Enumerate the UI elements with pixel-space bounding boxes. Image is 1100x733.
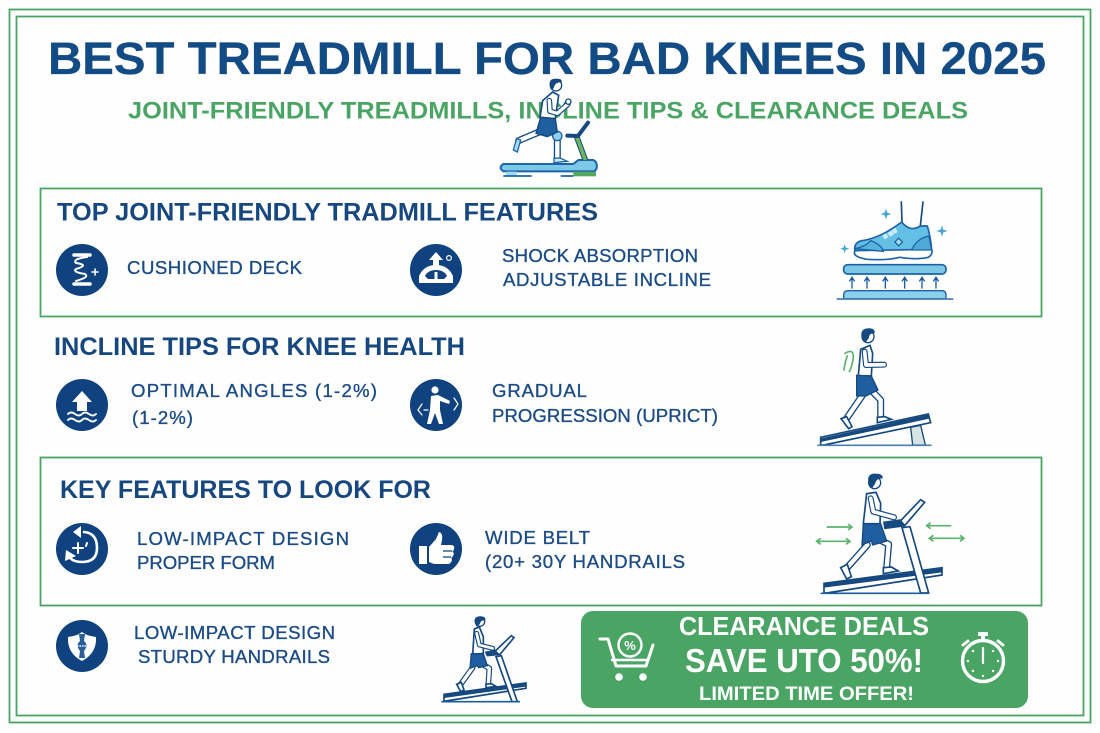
panel: key features [40,458,1042,606]
illustration: treadmill walker with arrows [817,474,964,593]
text: shock absorption, adjustable incline: ADJUSTABLE INCLINE [503,269,711,290]
text: low-impact design, proper form: LOW-IMPACT DESIGN [137,528,349,549]
icon: person with arrows [410,379,462,431]
text: wide belt [485,527,685,572]
text: optimal angles: (1-2%) [132,407,193,428]
heading: incline tips: INCLINE TIPS FOR KNEE HEALTH [54,333,465,361]
icon: stopwatch [962,632,1004,682]
text: save up to 50%: SAVE UTO 50%! [685,642,923,679]
icon: rotation arrows [56,523,108,575]
text: limited time offer: LIMITED TIME OFFER! [699,683,914,705]
illustration: walker on incline [817,328,932,445]
text: low-impact design, sturdy handrails: STURDY HANDRAILS [138,646,330,667]
text: shock absorption, adjustable incline [502,245,711,290]
heading: features: TOP JOINT-FRIENDLY TRADMILL FEATURES [57,198,598,226]
text: low-impact design, proper form: PROPER FORM [137,552,275,573]
text: wide belt: (20+ 30Y HANDRAILS [485,551,685,572]
text: low-impact design, proper form [137,528,349,573]
illustration: cushioned shoe [837,202,953,299]
icon: cart with percent [600,634,653,681]
text: cushioned deck: CUSHIONED DECK [127,257,303,278]
text: optimal angles: OPTIMAL ANGLES (1-2%) [131,380,377,401]
panel: top joint-friendly features [40,188,1042,316]
icon: thumbs up [410,523,462,575]
text: optimal angles [131,380,377,428]
icon: cart with percent: % [624,638,636,653]
icon: arrow up and waves [56,379,108,431]
icon: incline gauge [410,244,462,296]
text: low-impact design, sturdy handrails [134,622,335,667]
icon: shield with knee [56,620,108,672]
illustration: small treadmill walker [441,616,526,702]
text: wide belt: WIDE BELT [485,527,590,548]
text: low-impact design, sturdy handrails: LOW-IMPACT DESIGN [134,622,335,643]
text: gradual progression: GRADUAL [492,380,587,401]
icon: spring [56,244,108,296]
text: shock absorption, adjustable incline: SHOCK ABSORPTION [502,245,698,266]
text: gradual progression: PROGRESSION (UPRICT) [492,405,718,426]
text: gradual progression [492,380,718,426]
text: clearance deals: CLEARANCE DEALS [679,613,929,641]
illustration: runner on treadmill [501,79,597,176]
callout: clearance deals [581,611,1028,708]
title: BEST TREADMILL FOR BAD KNEES IN 2025 [48,33,1046,84]
subtitle: JOINT-FRIENDLY TREADMILLS, INCLINE TIPS & CLEARANCE DEALS [128,98,968,124]
heading: key features: KEY FEATURES TO LOOK FOR [60,476,431,504]
